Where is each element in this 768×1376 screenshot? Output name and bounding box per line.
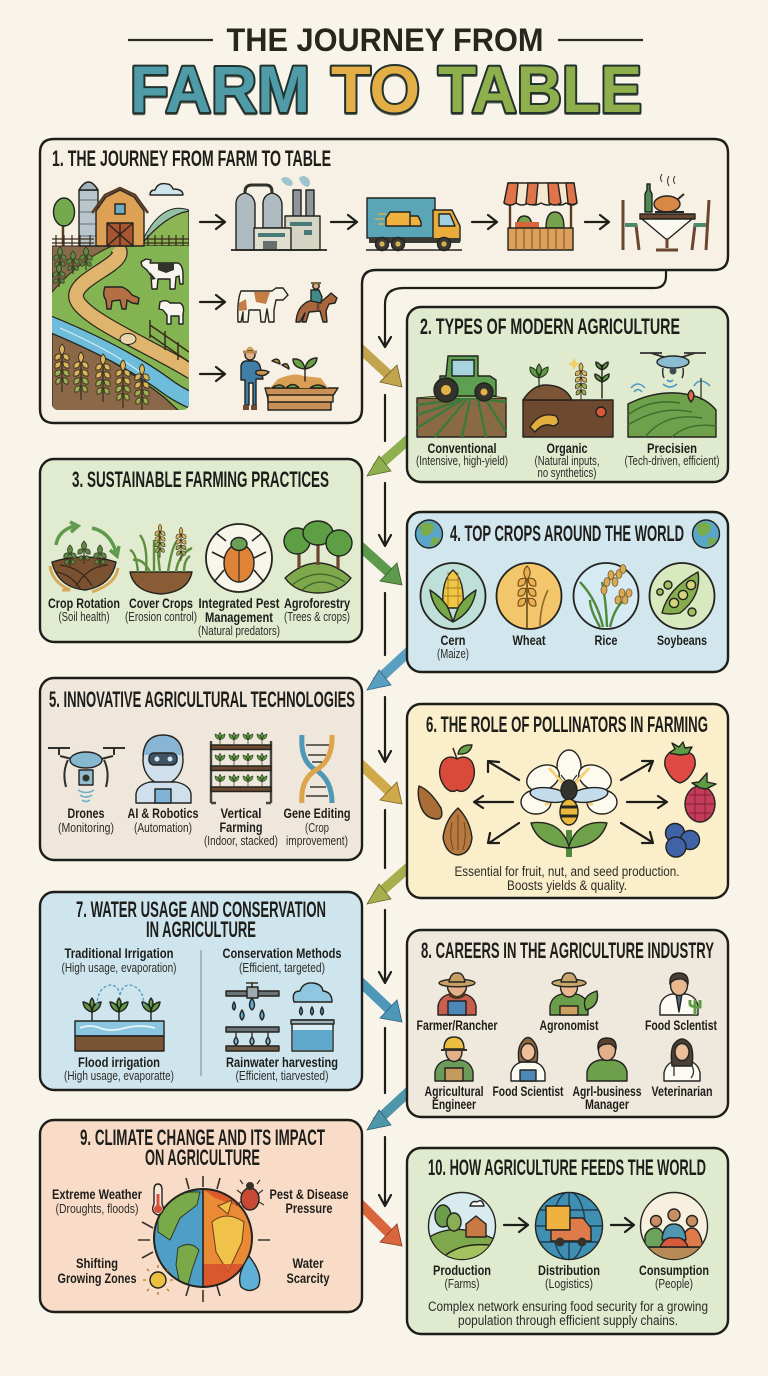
label: veterinarian: Veterinarian bbox=[652, 1084, 712, 1099]
arrow: panel 7 to 8 bbox=[352, 974, 402, 1022]
label: AI and robotics: AI & Robotics bbox=[128, 806, 198, 821]
label: distribution: Distribution bbox=[538, 1263, 600, 1278]
label: agricultural engineer bbox=[424, 1084, 484, 1112]
label: gene editing: (Crop bbox=[305, 821, 329, 835]
label: shifting growing zones: Shifting bbox=[76, 1256, 118, 1271]
label: wheat: Wheat bbox=[512, 633, 546, 648]
icon: precision drone over fields bbox=[628, 353, 716, 437]
panel 10: how agriculture feeds the world bbox=[407, 1148, 728, 1334]
label: corn bbox=[437, 633, 469, 661]
icon: drone bbox=[48, 748, 125, 802]
icon: processing factory bbox=[231, 176, 327, 250]
label: conservation methods: Conservation Methods bbox=[222, 946, 342, 961]
label: farmer/rancher: Farmer/Rancher bbox=[416, 1018, 498, 1033]
icon: cow and rider bbox=[238, 283, 337, 322]
label: rainwater harvesting bbox=[226, 1055, 338, 1083]
icon: production circle bbox=[428, 1192, 496, 1260]
icon: globe right bbox=[692, 520, 720, 548]
label: flood irrigation: Flood irrigation bbox=[78, 1055, 160, 1070]
illustration: farm landscape bbox=[52, 208, 189, 410]
label: water scarcity: Water bbox=[292, 1256, 324, 1271]
label: drones bbox=[58, 806, 114, 835]
arrow: panel 6 to 7 bbox=[367, 860, 417, 904]
label: precision: Precisien bbox=[647, 441, 697, 456]
connector: panel 1 to panel 2 bbox=[379, 270, 666, 347]
heading 7: 7. WATER USAGE AND CONSERVATION bbox=[76, 897, 326, 922]
label: cover crops bbox=[125, 596, 197, 624]
label: vertical farming: Farming bbox=[220, 820, 262, 835]
panel 5: innovative agricultural technologies bbox=[40, 678, 362, 860]
label: food scientist: Food Sclentist bbox=[645, 1018, 717, 1033]
icon: apple bbox=[440, 745, 474, 791]
icon: distribution circle bbox=[535, 1192, 603, 1260]
panel 6: the role of pollinators bbox=[407, 704, 728, 898]
label: pest and disease: Pressure bbox=[286, 1201, 333, 1216]
label: crop rotation bbox=[48, 596, 120, 624]
icon: drip irrigation bbox=[226, 982, 279, 1051]
icon: water drop bbox=[240, 1256, 260, 1290]
icon: DNA gene editing bbox=[302, 735, 332, 803]
label: organic: Organic bbox=[546, 441, 588, 456]
label: food scientist: Food Scientist bbox=[492, 1084, 564, 1099]
label: agroforestry: Agroforestry bbox=[284, 596, 350, 611]
icon: crop rotation bbox=[50, 522, 119, 592]
label: gene editing: improvement) bbox=[286, 834, 348, 848]
icon: corn bbox=[420, 563, 486, 629]
label: agronomist: Agronomist bbox=[540, 1018, 599, 1033]
label: vertical farming: Vertical bbox=[220, 806, 262, 821]
icon: blueberries bbox=[666, 824, 700, 857]
grazing animals bbox=[104, 259, 184, 324]
title: THE JOURNEY FROM bbox=[226, 22, 544, 58]
label: organic: (Natural inputs, bbox=[534, 454, 600, 468]
label: extreme weather bbox=[52, 1187, 143, 1216]
heading 9 bbox=[80, 1125, 325, 1170]
icon: consumption circle bbox=[640, 1192, 708, 1260]
text: food security note: population through efficient supply chains. bbox=[458, 1313, 678, 1328]
icon: raspberry bbox=[685, 773, 716, 822]
person: food scientist bbox=[660, 973, 700, 1015]
label: consumption: (People) bbox=[655, 1277, 693, 1291]
icon: AI robot bbox=[136, 735, 191, 803]
icon: soybeans bbox=[650, 563, 714, 629]
label: traditional irrigation: Traditional Irrigation bbox=[64, 946, 174, 961]
label: shifting growing zones: Growing Zones bbox=[58, 1271, 136, 1286]
text: pollinator note: Essential for fruit, nut, and seed production. bbox=[454, 864, 680, 879]
text: pollinator note bbox=[454, 864, 680, 893]
icon: integrated pest management bbox=[206, 524, 272, 592]
icon: delivery truck bbox=[366, 198, 462, 250]
icon: organic soil and plants bbox=[523, 358, 613, 437]
barn and silo bbox=[52, 182, 189, 246]
icon: vertical farm bbox=[211, 732, 271, 803]
arrow: panel 2 to 3 bbox=[367, 432, 417, 476]
icon: rainwater barrel bbox=[291, 983, 334, 1051]
label: flood irrigation: (High usage, evaporatte) bbox=[64, 1069, 174, 1083]
label: drones: Drones bbox=[68, 806, 104, 821]
person: veterinarian bbox=[664, 1039, 700, 1081]
arrows in flow row 1 bbox=[200, 215, 609, 381]
title bbox=[128, 22, 643, 126]
icon: strawberry bbox=[665, 742, 695, 783]
label: consumption: Consumption bbox=[639, 1263, 709, 1278]
label: production: Production bbox=[433, 1263, 491, 1278]
label: rainwater harvesting: (Efficient, tiarvested) bbox=[236, 1069, 328, 1083]
label: integrated pest management bbox=[198, 596, 280, 638]
heading 7 bbox=[76, 897, 326, 942]
icon: wheat bbox=[496, 563, 562, 629]
arrow: panel 8 to 9 bbox=[367, 1084, 417, 1130]
label: traditional irrigation bbox=[62, 946, 176, 975]
arrow: panel 5 to 6 bbox=[352, 756, 402, 804]
label: organic bbox=[534, 441, 600, 480]
person: food scientist 2 bbox=[511, 1038, 545, 1081]
label: vertical farming: (Indoor, stacked) bbox=[204, 834, 278, 848]
label: pest and disease bbox=[270, 1187, 349, 1216]
icons: pollination arrows bbox=[474, 761, 667, 843]
panel 1: the journey from farm to table bbox=[40, 139, 728, 423]
label: crop rotation: (Soil health) bbox=[58, 610, 110, 624]
label: conservation methods: (Efficient, targeted) bbox=[239, 961, 325, 975]
person: agronomist bbox=[550, 973, 598, 1015]
icon: dinner table bbox=[623, 174, 709, 250]
arrow: panel 4 to 5 bbox=[367, 644, 417, 690]
label: production: (Farms) bbox=[444, 1277, 480, 1291]
arrow: panel 1 to 2 bbox=[352, 341, 402, 387]
label: AI and robotics: (Automation) bbox=[134, 821, 192, 835]
heading 1: 1. THE JOURNEY FROM FARM TO TABLE bbox=[52, 146, 331, 171]
label: integrated pest management: Management bbox=[205, 610, 273, 625]
label: corn: Cern bbox=[440, 633, 466, 648]
panel 8: careers bbox=[407, 930, 728, 1117]
label: pest and disease: Pest & Disease bbox=[270, 1187, 349, 1202]
label: gene editing: Gene Editing bbox=[284, 806, 350, 821]
label: distribution bbox=[538, 1263, 600, 1291]
label: agri-business manager bbox=[572, 1084, 642, 1112]
label: consumption bbox=[639, 1263, 709, 1291]
label: extreme weather: Extreme Weather bbox=[52, 1187, 143, 1202]
label: distribution: (Logistics) bbox=[545, 1277, 593, 1291]
icon: farmer with raised bed bbox=[241, 346, 338, 410]
label: gene editing bbox=[284, 806, 350, 848]
label: precision bbox=[624, 441, 720, 468]
panel 3: sustainable farming practices bbox=[40, 459, 362, 642]
label: water scarcity: Scarcity bbox=[286, 1271, 330, 1286]
label: crop rotation: Crop Rotation bbox=[48, 596, 120, 611]
panel 4: top crops around the world bbox=[407, 512, 728, 672]
icon: bee on flower bbox=[521, 750, 617, 857]
icon: rice bbox=[574, 563, 638, 629]
label: rice: Rice bbox=[594, 633, 618, 648]
label: agroforestry bbox=[284, 596, 350, 624]
label: agricultural engineer: Engineer bbox=[432, 1097, 477, 1112]
label: vertical farming bbox=[204, 806, 278, 848]
label: agri-business manager: Agrl-business bbox=[572, 1084, 642, 1099]
heading 9: 9. CLIMATE CHANGE AND ITS IMPACT bbox=[80, 1125, 325, 1150]
icon: pest beetle bbox=[236, 1180, 264, 1210]
person: farmer bbox=[438, 973, 476, 1015]
icon: thermometer bbox=[153, 1184, 163, 1215]
panel 9: climate change bbox=[40, 1120, 362, 1312]
label: conservation methods bbox=[222, 946, 342, 975]
icon: market stall bbox=[504, 183, 577, 250]
icon: cover crops bbox=[130, 524, 192, 594]
label: conventional bbox=[416, 441, 508, 468]
heading 5: 5. INNOVATIVE AGRICULTURAL TECHNOLOGIES bbox=[49, 687, 355, 712]
icon: conventional tractor field bbox=[417, 356, 506, 437]
icon: flood irrigation bbox=[75, 985, 164, 1051]
text: food security note: Complex network ensuring food security for a growing bbox=[428, 1299, 708, 1314]
arrows: production to consumption bbox=[504, 1218, 634, 1232]
label: conventional: (Intensive, high-yield) bbox=[416, 454, 508, 468]
icon: globe left bbox=[416, 520, 442, 548]
vertical flow arrows bbox=[379, 395, 391, 1206]
label: shifting growing zones bbox=[58, 1256, 136, 1286]
label: cover crops: Cover Crops bbox=[129, 596, 193, 611]
label: integrated pest management: Integrated Pest bbox=[198, 596, 280, 611]
icon: sun bbox=[143, 1265, 173, 1295]
label: agricultural engineer: Agricultural bbox=[424, 1084, 484, 1099]
icon: almonds bbox=[418, 786, 472, 855]
arrow: panel 9 to 10 bbox=[352, 1196, 402, 1246]
text: pollinator note: Boosts yields & quality. bbox=[507, 878, 627, 893]
label: soybeans: Soybeans bbox=[657, 633, 707, 648]
title: TO bbox=[331, 52, 420, 126]
label: rainwater harvesting: Rainwater harvesting bbox=[226, 1055, 338, 1070]
label: agri-business manager: Manager bbox=[585, 1097, 630, 1112]
label: organic: no synthetics) bbox=[538, 466, 596, 480]
label: conventional: Conventional bbox=[428, 441, 496, 456]
label: integrated pest management: (Natural predators) bbox=[198, 624, 280, 638]
title: TABLE bbox=[438, 52, 642, 126]
arrow: panel 3 to 4 bbox=[352, 539, 402, 585]
panel 2: types of modern agriculture bbox=[407, 307, 728, 482]
heading 7: IN AGRICULTURE bbox=[146, 917, 256, 942]
title: FARM bbox=[130, 52, 310, 126]
label: production bbox=[433, 1263, 491, 1291]
label: AI and robotics bbox=[128, 806, 198, 835]
heading 9: ON AGRICULTURE bbox=[145, 1145, 260, 1170]
heading 3: 3. SUSTAINABLE FARMING PRACTICES bbox=[72, 467, 329, 492]
person: agricultural engineer bbox=[435, 1037, 473, 1081]
label: precision: (Tech-driven, efficient) bbox=[624, 454, 720, 468]
label: extreme weather: (Droughts, floods) bbox=[56, 1202, 138, 1216]
icon: agroforestry bbox=[284, 521, 352, 593]
label: water scarcity bbox=[286, 1256, 330, 1286]
label: agroforestry: (Trees & crops) bbox=[284, 610, 350, 624]
icon: split globe bbox=[138, 1176, 270, 1302]
label: corn: (Maize) bbox=[437, 647, 469, 661]
label: drones: (Monitoring) bbox=[58, 821, 114, 835]
person: agri-business manager bbox=[587, 1038, 627, 1081]
label: flood irrigation bbox=[64, 1055, 174, 1083]
panel 7: water usage and conservation bbox=[40, 892, 362, 1090]
label: cover crops: (Erosion control) bbox=[125, 610, 197, 624]
label: traditional irrigation: (High usage, evaporation) bbox=[62, 961, 176, 975]
text: food security note bbox=[428, 1299, 708, 1328]
